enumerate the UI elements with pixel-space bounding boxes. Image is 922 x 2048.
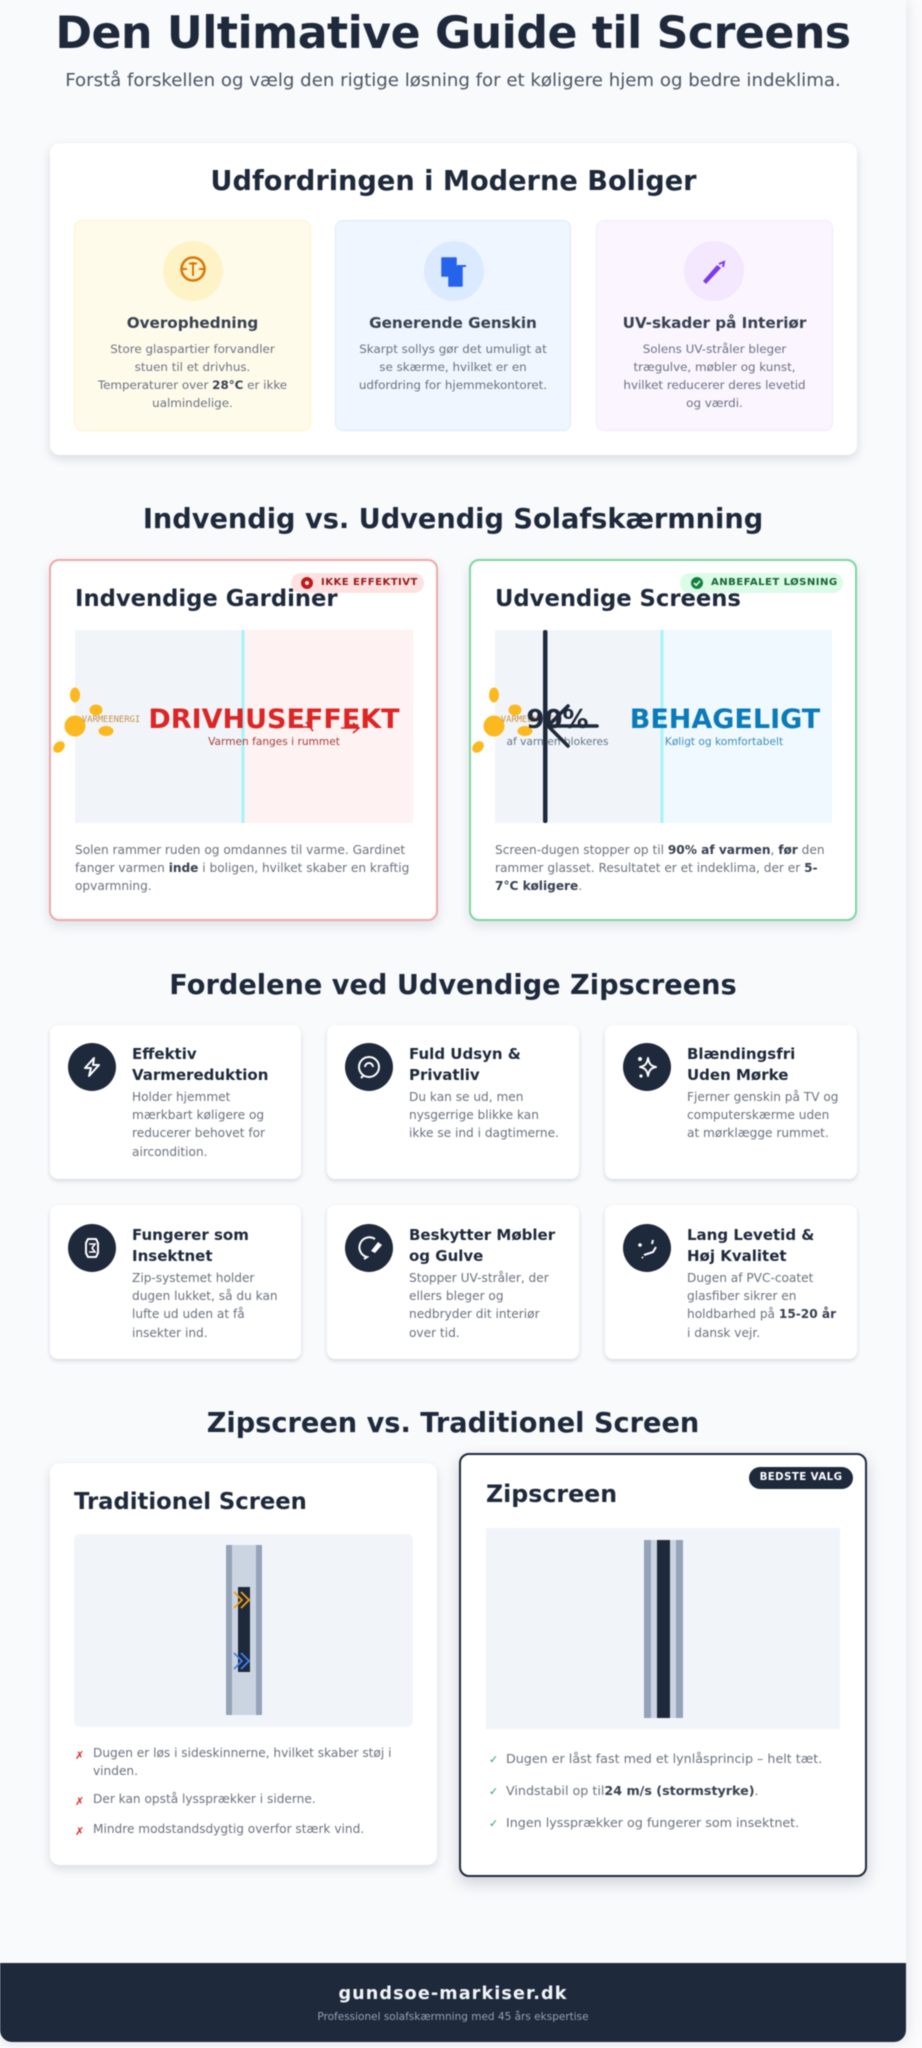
icon: eye (345, 1043, 393, 1091)
card text: udfordring for hjemmekontoret. (359, 378, 547, 392)
card text: hvilket reducerer deres levetid (623, 378, 806, 392)
text (132, 1090, 266, 1159)
card title: Overophedning (127, 314, 258, 332)
text: ikke se ind i dagtimerne. (409, 1126, 559, 1140)
body text (74, 843, 409, 894)
badge: not effective (291, 573, 424, 593)
icon: quality dots (623, 1224, 671, 1272)
card text: se skærme, hvilket er en (379, 360, 527, 374)
text: glasfiber sikrer en (687, 1289, 796, 1303)
diagram: greenhouse effect: Varmen fanges i rummet (208, 736, 340, 748)
text (409, 1090, 559, 1140)
text: mærkbart køligere og (132, 1108, 264, 1122)
card text: Temperaturer over 28°C er ikke (98, 378, 287, 392)
title: Varmereduktion (132, 1066, 268, 1084)
card: glare (335, 220, 571, 431)
drawback marks (75, 1749, 84, 1838)
heading: inside vs outside: Indvendig vs. Udvendig Solafskærmning (143, 504, 763, 535)
text: insekter ind. (132, 1326, 208, 1340)
badge: recommended (680, 573, 843, 593)
benefit card: long lifetime (605, 1205, 857, 1359)
card text: trægulve, møbler og kunst, (633, 360, 796, 374)
footer site name: gundsoe-markiser.dk (338, 1984, 568, 2004)
title: Lang Levetid & (687, 1226, 814, 1244)
text: Zip-systemet holder (132, 1271, 254, 1285)
advantage 1: Dugen er låst fast med et lynlåsprincip – helt tæt. (506, 1751, 822, 1766)
advantage 2: Vindstabil op til24 m/s (stormstyrke). (506, 1783, 759, 1798)
diagram: screen blocks heat: 90% (526, 705, 589, 735)
text (409, 1270, 550, 1340)
heading: Zipscreen (486, 1480, 617, 1508)
body text (495, 843, 825, 894)
body text: fanger varmen inde i boligen, hvilket skaber en kraftig (75, 861, 409, 875)
title: Fuld Udsyn & (409, 1044, 521, 1062)
text: Du kan se ud, men (409, 1090, 523, 1104)
diagram: locked fabric in rails (486, 1528, 840, 1729)
text: computerskærme uden (687, 1108, 829, 1122)
text (687, 1271, 837, 1340)
icon: overlapping blocks (424, 241, 484, 301)
title: Insektnet (132, 1246, 213, 1264)
diagram: screen blocks heat: af varmen blokeres (506, 736, 609, 748)
text: aircondition. (132, 1145, 208, 1159)
text: holdbarhed på 15-20 år (687, 1307, 836, 1321)
diagram: screen blocks heat (471, 629, 832, 824)
heading: Traditionel Screen (74, 1489, 307, 1515)
drawback 1 (92, 1746, 392, 1778)
footer tagline: Professionel solafskærmning med 45 års ekspertise (317, 2011, 589, 2023)
title: Høj Kvalitet (687, 1246, 787, 1264)
badge: not effective: IKKE EFFEKTIVT (321, 577, 418, 588)
heading: Udvendige Screens (495, 586, 741, 612)
panel: challenges in modern homes (50, 143, 857, 455)
text: i dansk vejr. (687, 1326, 760, 1340)
card text: stuen til et drivhus. (135, 360, 250, 374)
text: reducerer behovet for (132, 1126, 265, 1140)
title (132, 1044, 268, 1084)
text: Fjerner genskin på TV og (687, 1090, 838, 1104)
icon: x circle (301, 577, 313, 589)
panel: zipscreen (459, 1453, 867, 1877)
icon: lightning (68, 1043, 116, 1091)
diagram: loose fabric in rails (74, 1534, 413, 1727)
text: at mørklægge rummet. (687, 1126, 829, 1140)
text: dugen lukket, så du kan (132, 1289, 278, 1303)
title: Fungerer som (132, 1226, 249, 1244)
title (408, 1226, 556, 1265)
icon: sparkle (623, 1043, 671, 1091)
diagram: screen blocks heat: VARMEENERGI (501, 715, 559, 725)
diagram: screen blocks heat: Køligt og komfortabelt (665, 736, 783, 748)
badge: best choice: BEDSTE VALG (760, 1472, 842, 1483)
panel: traditional screen (50, 1463, 437, 1865)
badge: recommended: ANBEFALET LØSNING (711, 577, 838, 588)
heading: Indvendige Gardiner (75, 586, 338, 612)
title: Blændingsfri (687, 1044, 795, 1062)
card title: Generende Genskin (369, 314, 537, 332)
title: Beskytter Møbler (409, 1226, 555, 1244)
heading: zipscreen vs traditional: Zipscreen vs. Traditionel Screen (207, 1408, 699, 1439)
text: nysgerrige blikke kan (409, 1108, 539, 1122)
text: Holder hjemmet (132, 1090, 230, 1104)
title (687, 1226, 814, 1265)
title: Effektiv (132, 1044, 197, 1062)
list: advantages: ✓ (489, 1817, 498, 1830)
icon: wand (684, 241, 744, 301)
advantage marks (489, 1753, 498, 1830)
list: drawbacks (75, 1746, 392, 1838)
title: Den Ultimative Guide til Screens (55, 8, 851, 59)
list: advantages (489, 1751, 822, 1830)
drawback 1: vinden. (93, 1764, 138, 1778)
list: drawbacks: ✗ (75, 1825, 84, 1838)
drawback marks: ✗ (75, 1749, 84, 1762)
diagram: screen blocks heat: BEHAGELIGT (630, 704, 821, 735)
card text: ualmindelige. (152, 396, 233, 410)
text: over tid. (409, 1326, 460, 1340)
card text: Solens UV-stråler bleger (643, 342, 786, 356)
diagram: greenhouse effect: DRIVHUSEFFEKT (148, 704, 400, 735)
badge: best choice (749, 1467, 853, 1489)
text (687, 1089, 838, 1140)
text: nedbryder dit interiør (409, 1307, 540, 1321)
list: drawbacks: ✗ (75, 1795, 84, 1808)
icon: net (68, 1224, 116, 1272)
heading: benefits: Fordelene ved Udvendige Zipscreens (169, 970, 737, 1001)
title: og Gulve (409, 1246, 483, 1264)
advantage 3: Ingen lyssprækker og fungerer som insektnet. (506, 1815, 799, 1830)
panel: interior curtains (49, 559, 438, 921)
card title: UV-skader på Interiør (623, 314, 806, 332)
title: Uden Mørke (687, 1066, 788, 1084)
card text (623, 342, 806, 410)
title (132, 1226, 249, 1264)
list: advantages: ✓ (489, 1785, 498, 1798)
card text: og værdi. (686, 396, 743, 410)
subtitle: Forstå forskellen og vælg den rigtige løsning for et køligere hjem og bedre indeklima. (65, 70, 841, 91)
body text: rammer glasset. Resultatet er et indeklima, der er 5- (495, 861, 818, 875)
benefit card: heat reduction (50, 1025, 301, 1179)
title (687, 1044, 795, 1084)
benefit card: insect net (50, 1205, 301, 1359)
benefit card: view and privacy (327, 1025, 579, 1179)
drawback 3: Mindre modstandsdygtig overfor stærk vind. (93, 1822, 364, 1836)
card: UV damage (596, 220, 833, 431)
advantage marks: ✓ (489, 1753, 498, 1766)
text: Stopper UV-stråler, der (409, 1271, 549, 1285)
text: Dugen af PVC-coatet (687, 1271, 813, 1285)
heading: challenges: Udfordringen i Moderne Boliger (210, 166, 697, 197)
card: overheating (74, 220, 311, 431)
title: Privatliv (409, 1066, 480, 1084)
icon: check circle (691, 577, 703, 589)
body text: opvarmning. (75, 879, 152, 893)
card text: Store glaspartier forvandler (110, 342, 275, 356)
text: ellers bleger og (409, 1289, 504, 1303)
drawback 1: Dugen er løs i sideskinnerne, hvilket skaber støj i (93, 1746, 391, 1760)
icon: shield swirl (345, 1224, 393, 1272)
icon: gauge (163, 241, 223, 301)
diagram: greenhouse effect: VARMEENERGI (82, 715, 140, 725)
title (409, 1044, 521, 1084)
text (132, 1271, 278, 1340)
footer (0, 1963, 906, 2042)
benefit card: protects furniture (327, 1205, 579, 1359)
body text: Screen-dugen stopper op til 90% af varmen, før den (495, 843, 825, 857)
body text: Solen rammer ruden og omdannes til varme. Gardinet (75, 843, 405, 857)
card text: Skarpt sollys gør det umuligt at (359, 342, 547, 356)
diagram: greenhouse effect (52, 630, 413, 824)
body text: 7°C køligere. (495, 879, 582, 893)
panel: exterior screens (469, 559, 857, 921)
card text (359, 342, 547, 392)
drawback 2: Der kan opstå lyssprækker i siderne. (93, 1792, 316, 1806)
text: lufte ud uden at få (132, 1307, 245, 1321)
card text (97, 342, 288, 410)
benefit card: glare-free (605, 1025, 857, 1179)
